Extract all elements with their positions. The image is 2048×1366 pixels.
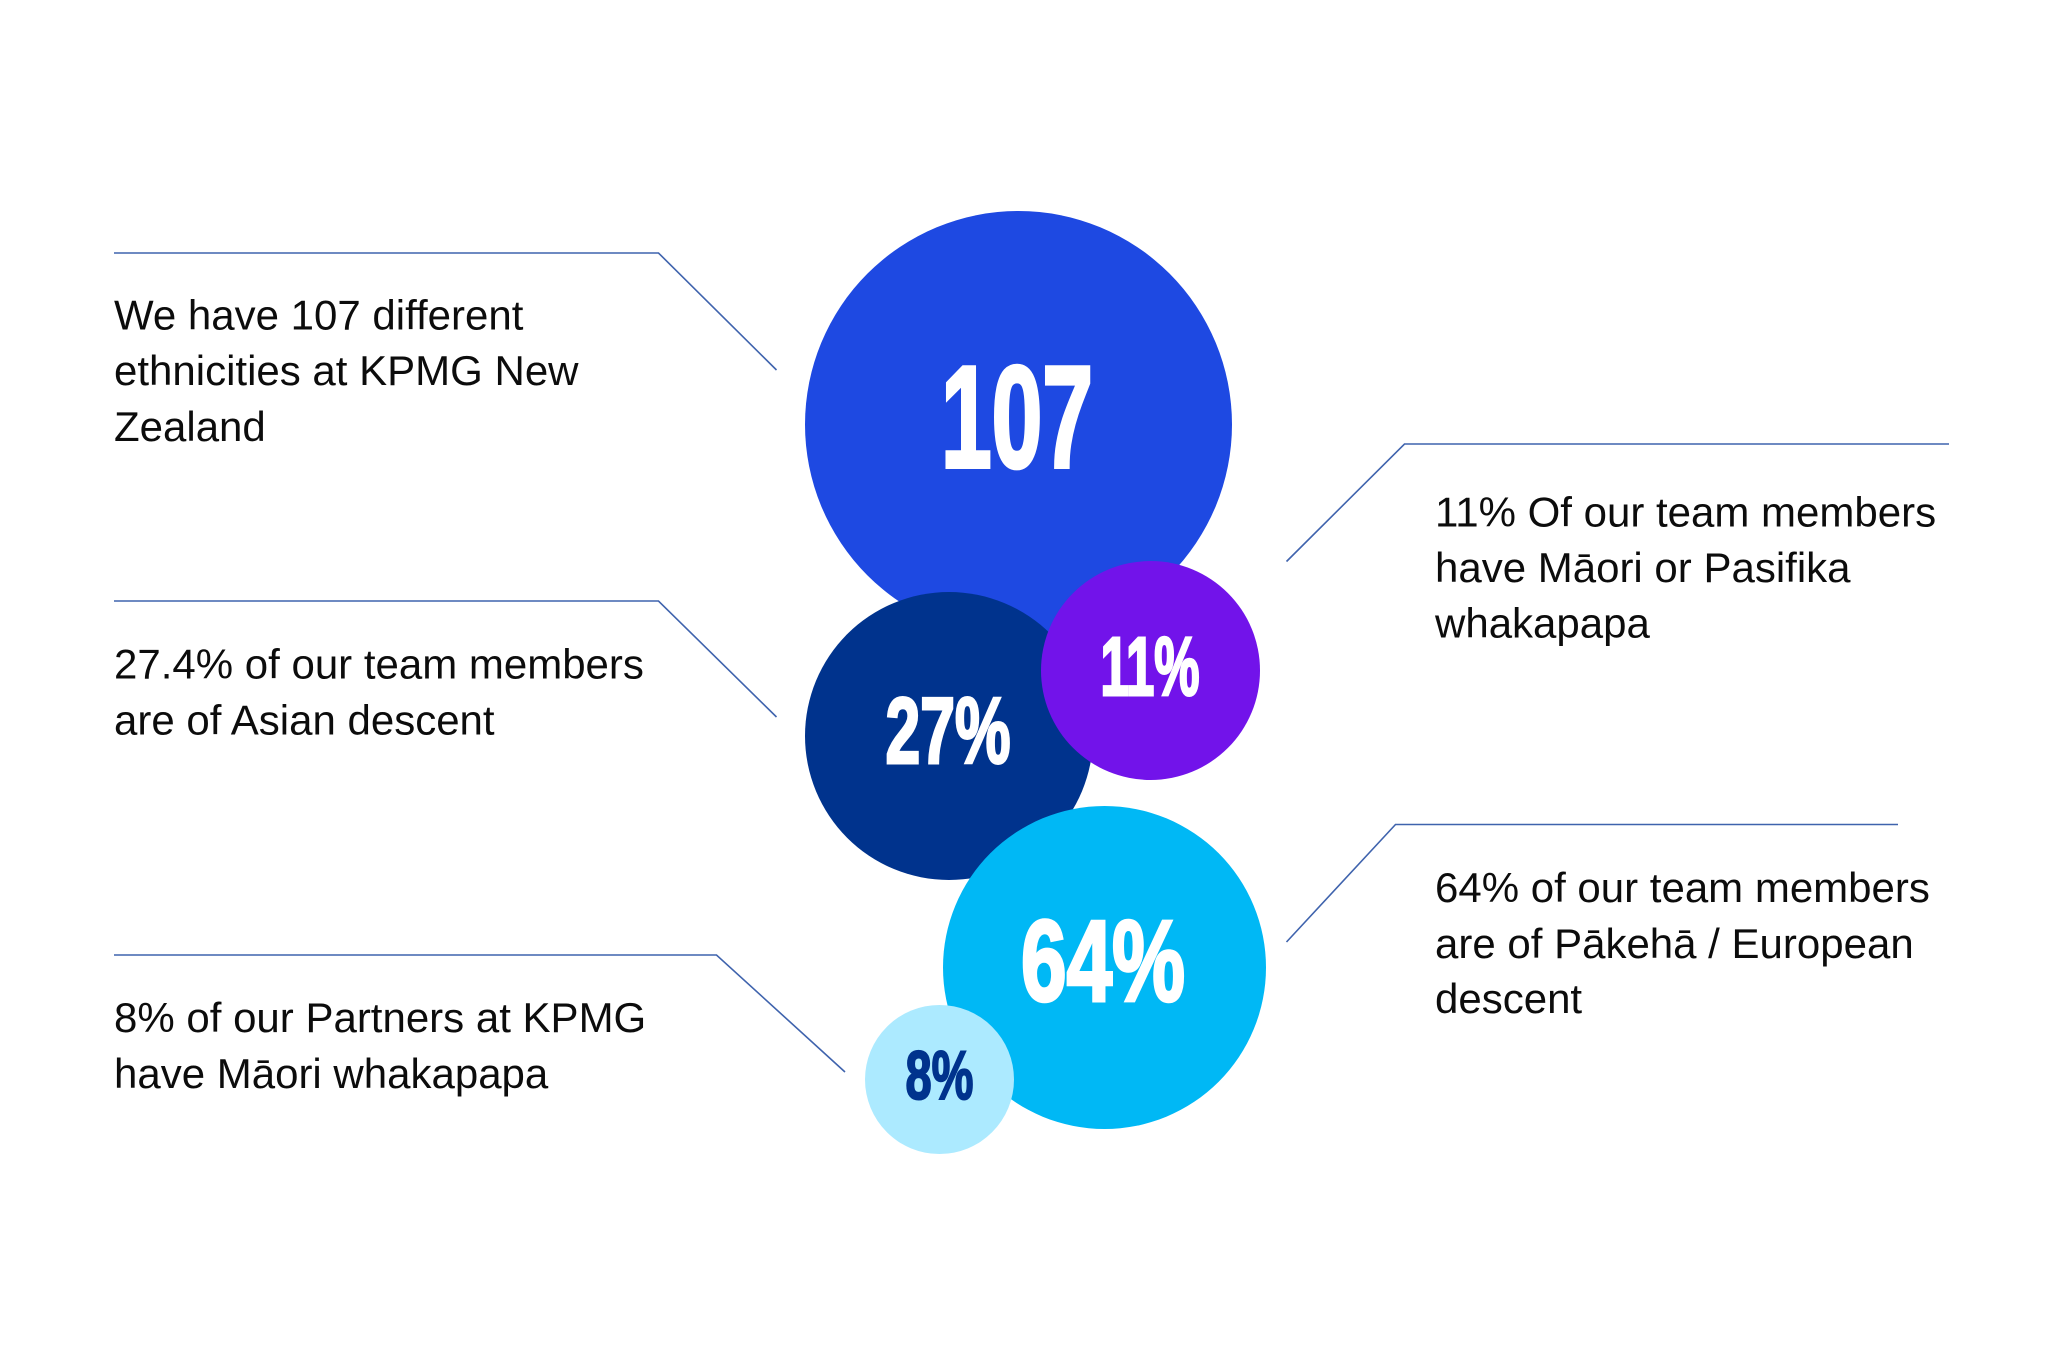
bubble: 8%: 8% [906, 1037, 974, 1114]
bubble: 107 [805, 211, 1232, 638]
callout: 27.4% Asian descent: 27.4% of our team members [114, 640, 644, 688]
bubble: 8% [865, 1005, 1014, 1154]
callout: 64% Pākehā / European: descent [1435, 975, 1582, 1022]
bubble: 27%: 27% [886, 678, 1010, 783]
bubble: 27% [805, 592, 1093, 880]
bubble: 64%: 64% [1021, 898, 1185, 1026]
callout: 107 ethnicities: Zealand [114, 403, 266, 450]
bubble: 107: 107 [941, 336, 1093, 498]
callout: 11% Māori or Pasifika: have Māori or Pasifika [1435, 544, 1851, 591]
bubble: 11%: 11% [1100, 620, 1200, 713]
callout: 11% Māori or Pasifika: whakapapa [1434, 600, 1650, 646]
bubble: 64% [943, 806, 1266, 1129]
callout: 27.4% Asian descent: are of Asian descent [114, 696, 495, 744]
callout: 8% Partners Māori whakapapa: have Māori whakapapa [114, 1050, 549, 1097]
callout: 64% Pākehā / European [1286, 824, 1930, 1022]
callout: 8% Partners Māori whakapapa [114, 955, 845, 1097]
callout: 11% Māori or Pasifika [1286, 444, 1949, 646]
callout: 11% Māori or Pasifika: 11% Of our team members [1435, 488, 1936, 536]
bubble: 11% [1041, 561, 1260, 780]
callout: 64% Pākehā / European: are of Pākehā / European [1435, 920, 1914, 967]
callout: 8% Partners Māori whakapapa: 8% of our Partners at KPMG [114, 994, 646, 1041]
callout: 107 ethnicities [114, 253, 776, 450]
callout: 107 ethnicities: ethnicities at KPMG New [114, 347, 579, 394]
callout: 64% Pākehā / European: 64% of our team members [1435, 864, 1930, 911]
callout: 107 ethnicities: We have 107 different [114, 292, 524, 338]
callout: 27.4% Asian descent [114, 601, 776, 744]
